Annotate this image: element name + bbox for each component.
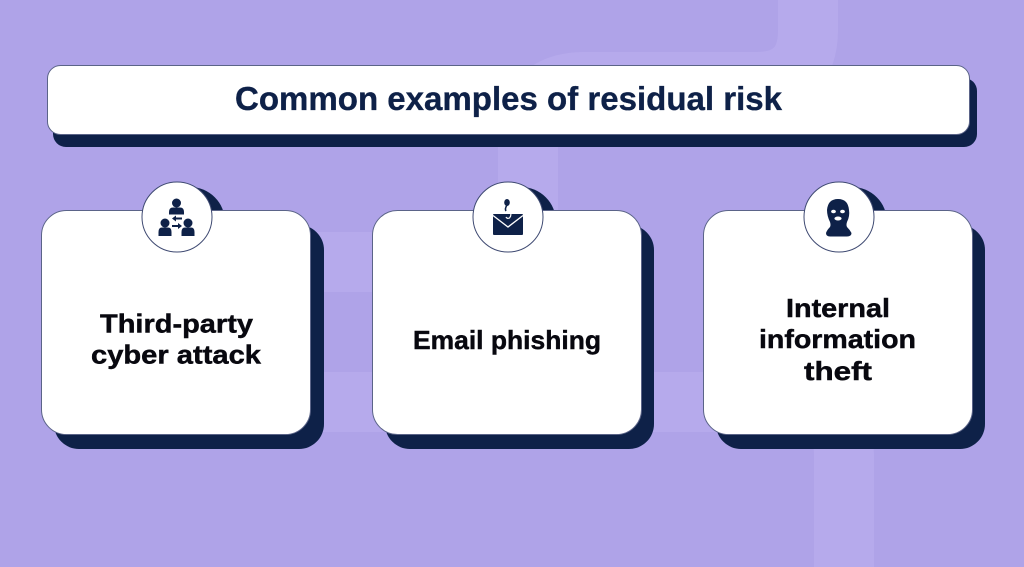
label: Third-party <box>100 308 254 338</box>
icon: balaclava <box>826 199 852 236</box>
icon: people exchanging <box>158 198 194 236</box>
icon: hook on envelope <box>493 199 523 235</box>
label: information <box>759 324 916 354</box>
label: cyber attack <box>91 340 262 370</box>
label: theft <box>804 356 872 386</box>
heading: Common examples of residual risk <box>235 80 783 117</box>
panel: internal information theft <box>704 182 985 449</box>
panel: title banner <box>48 66 977 147</box>
panel: third-party cyber attack <box>42 182 324 449</box>
label: Email phishing <box>413 325 601 355</box>
label: Internal <box>786 293 890 323</box>
panel: email phishing <box>372 182 654 449</box>
